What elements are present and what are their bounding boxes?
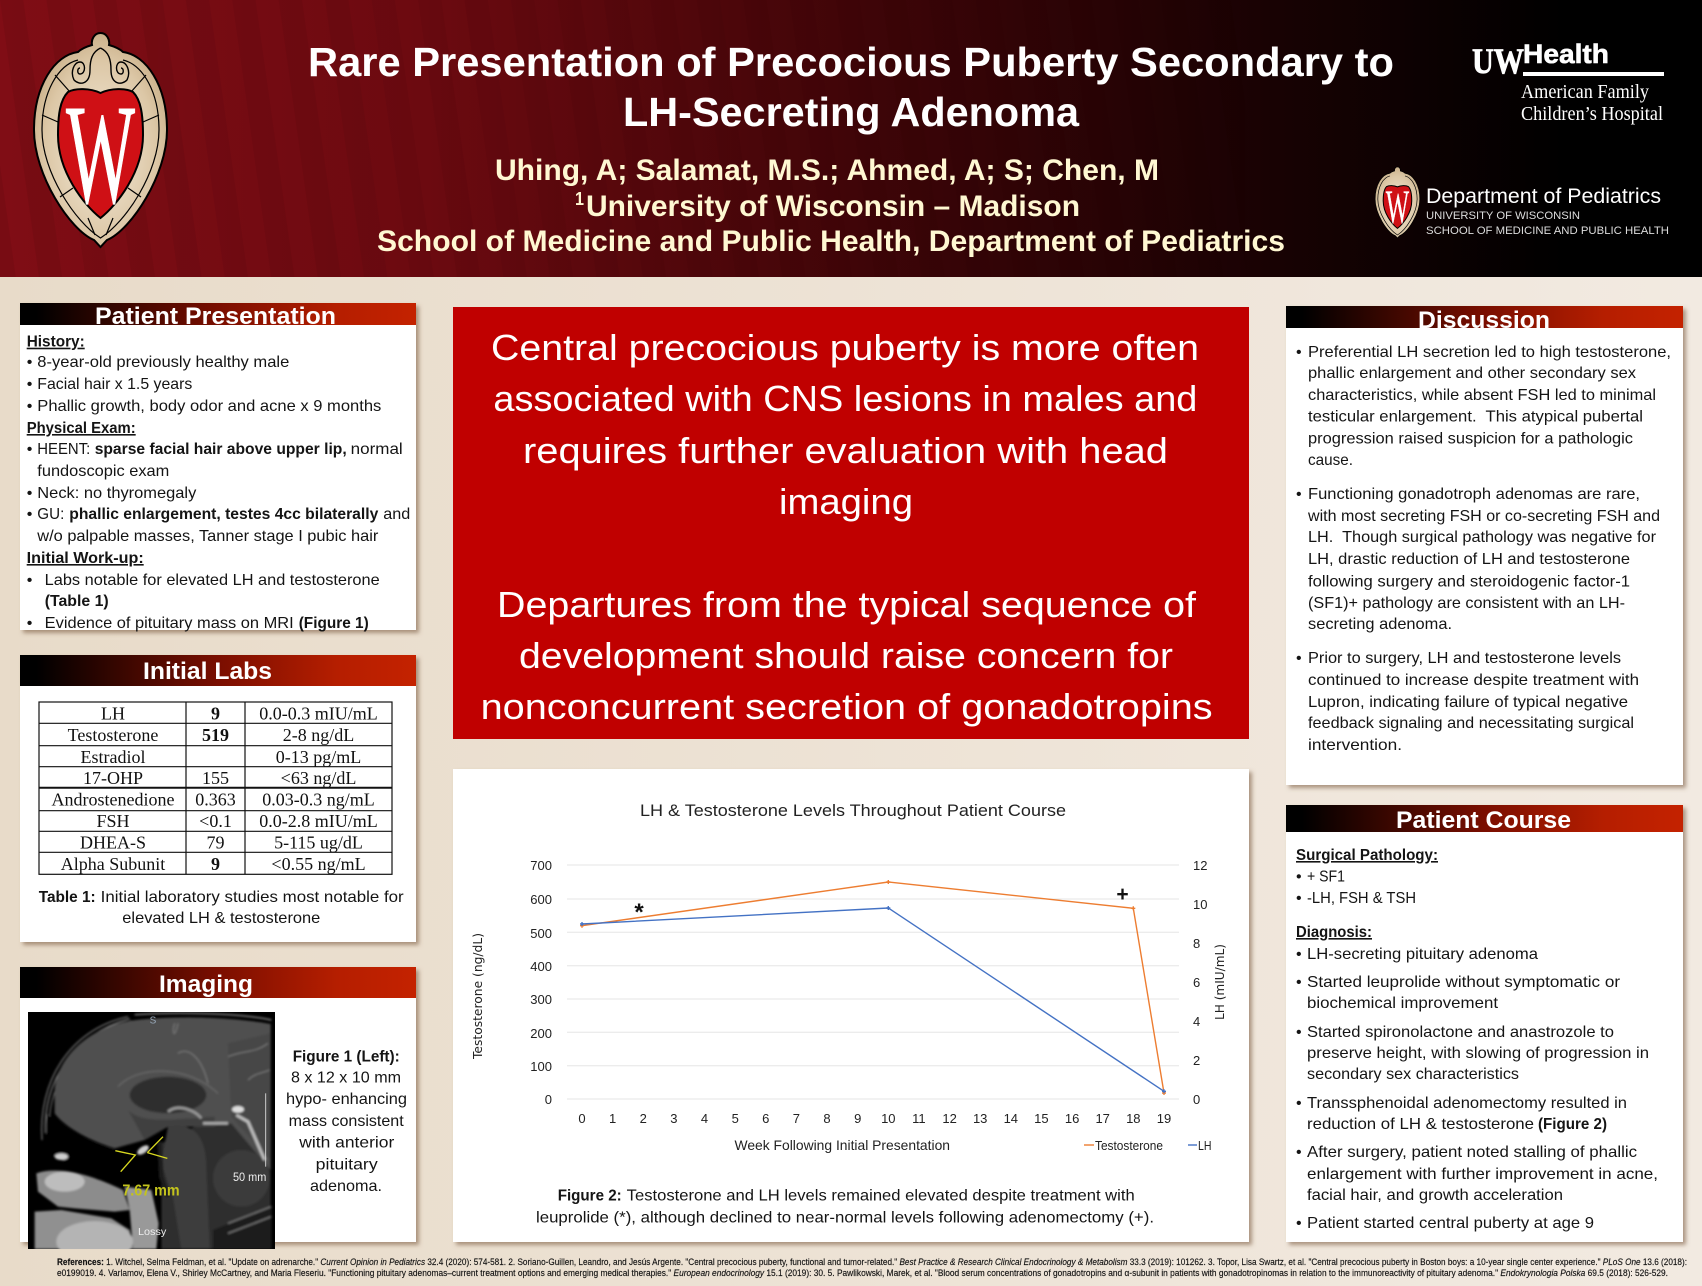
x axis ticks: 14 <box>1004 1111 1018 1126</box>
logo: UW Health American Family Children's Hospital: UW <box>1472 41 1524 81</box>
text: history, exam and work-up: phallic enlargement, testes 4cc bilaterally <box>69 506 378 523</box>
text: diagnosis and treatment: biochemical improvement <box>1307 995 1499 1012</box>
text: figure 1 caption: 8 x 12 x 10 mm <box>291 1069 401 1086</box>
text: discussion bullet 2: (SF1)+ pathology are consistent with an LH- <box>1308 595 1625 612</box>
text: diagnosis and treatment: (Figure 2) <box>1538 1116 1607 1133</box>
left axis ticks: 500 <box>530 926 552 941</box>
text: surgical pathology <box>1296 847 1438 907</box>
text: history, exam and work-up: • <box>27 506 32 523</box>
header banner <box>0 0 1702 277</box>
x axis ticks: 12 <box>942 1111 957 1126</box>
text: departures from typical sequence message: nonconcurrent secretion of gonadotropins <box>481 686 1213 727</box>
left axis ticks: 100 <box>530 1059 552 1074</box>
line chart <box>470 858 1227 1153</box>
text: history, exam and work-up: GU: <box>37 506 64 523</box>
logo: UW Health American Family Children's Hospital: American Family <box>1521 81 1649 103</box>
text: discussion bullet 3: Prior to surgery, LH and testosterone levels <box>1308 650 1621 667</box>
x axis ticks <box>578 1111 1171 1126</box>
text: surgical pathology: • <box>1296 890 1302 907</box>
right axis ticks <box>1193 858 1207 1107</box>
x axis ticks: 5 <box>732 1111 739 1126</box>
left axis ticks <box>530 858 552 1107</box>
text: history, exam and work-up: • <box>27 376 32 393</box>
text: history, exam and work-up: Facial hair x 1.5 years <box>37 376 192 393</box>
text: diagnosis and treatment: facial hair, and growth acceleration <box>1307 1187 1563 1204</box>
x axis ticks: 2 <box>640 1111 647 1126</box>
x axis ticks: 17 <box>1095 1111 1110 1126</box>
legend: Testosterone <box>1095 1138 1163 1153</box>
x axis ticks: 18 <box>1126 1111 1141 1126</box>
text: diagnosis and treatment: Patient started central puberty at age 9 <box>1307 1215 1594 1232</box>
panel: Patient Course <box>1286 805 1683 1242</box>
text: discussion bullet 3: feedback signaling and necessitating surgical <box>1308 715 1634 732</box>
text: discussion bullet 3: intervention. <box>1308 737 1402 754</box>
text: discussion bullet 1: Preferential LH secretion led to high testosterone, <box>1308 344 1671 361</box>
text: history, exam and work-up: • <box>27 398 32 415</box>
text: diagnosis and treatment: enlargement with further improvement in acne, <box>1307 1166 1658 1183</box>
text: departures from typical sequence message: Departures from the typical sequence of <box>497 584 1197 625</box>
x axis ticks: 16 <box>1065 1111 1079 1126</box>
panel: Discussion <box>1286 306 1683 785</box>
text: figure 1 caption: hypo- enhancing <box>286 1091 407 1108</box>
text: history, exam and work-up: Initial Work-up: <box>27 550 144 567</box>
title: Rare Presentation of Precocious Puberty Secondary to <box>308 39 1394 85</box>
text: diagnosis and treatment: preserve height, with slowing of progression in <box>1307 1045 1649 1062</box>
text: discussion bullet 2 <box>1296 486 1660 633</box>
text: discussion bullet 1: testicular enlargement. This atypical pubertal <box>1308 409 1643 426</box>
left axis ticks: 700 <box>530 858 552 873</box>
right axis ticks: 8 <box>1193 936 1200 951</box>
logo: Department of Pediatrics: Department of Pediatrics <box>1426 185 1661 208</box>
right axis ticks: 2 <box>1193 1053 1200 1068</box>
text: diagnosis and treatment: Diagnosis: <box>1296 924 1372 941</box>
table: initial lab values: 0.0-2.8 mIU/mL <box>259 811 378 831</box>
panel: key messages <box>453 307 1249 739</box>
text: discussion bullet 1: phallic enlargement and other secondary sex <box>1308 365 1636 382</box>
text: history, exam and work-up: • <box>27 441 32 458</box>
text: diagnosis and treatment: secondary sex characteristics <box>1307 1066 1519 1083</box>
annotation: leuprolide asterisk: * <box>634 899 644 926</box>
icon: UW crest small: W <box>1386 182 1409 234</box>
text: history, exam and work-up: HEENT: <box>37 441 90 458</box>
text: diagnosis and treatment: LH-secreting pituitary adenoma <box>1307 946 1538 963</box>
legend <box>1084 1138 1212 1153</box>
right axis ticks: 4 <box>1193 1014 1200 1029</box>
text: history, exam and work-up: Evidence of pituitary mass on MRI <box>45 615 294 632</box>
image: sagittal MRI of pituitary mass: 50 mm <box>233 1170 266 1184</box>
text: discussion bullet 1: cause. <box>1308 452 1353 469</box>
x axis ticks: 7 <box>793 1111 800 1126</box>
text: central precocious puberty message <box>491 327 1199 522</box>
text: history, exam and work-up: Phallic growth, body odor and acne x 9 months <box>37 398 381 415</box>
text: diagnosis and treatment: • <box>1296 1024 1302 1041</box>
text: discussion bullet 2: • <box>1296 486 1302 503</box>
table: initial lab values: LH <box>101 704 125 724</box>
text: figure 1 caption: adenoma. <box>310 1178 382 1195</box>
x axis ticks: 4 <box>701 1111 708 1126</box>
right axis ticks: 12 <box>1193 858 1207 873</box>
image: sagittal MRI of pituitary mass: 7.67 mm <box>122 1183 180 1200</box>
logo: Department of Pediatrics: SCHOOL OF MEDICINE AND PUBLIC HEALTH <box>1426 225 1669 237</box>
table: initial lab values: 79 <box>206 832 224 852</box>
text: discussion bullet 2: with most secreting FSH or co-secreting FSH and <box>1307 508 1660 525</box>
table: initial lab values <box>39 702 392 874</box>
text: history, exam and work-up: sparse facial hair above upper lip, <box>95 441 347 458</box>
title <box>308 39 1394 135</box>
table: initial lab values: Alpha Subunit <box>61 854 165 874</box>
text: figure 1 caption: mass consistent <box>289 1113 404 1130</box>
table: initial lab values: 0.363 <box>195 790 236 810</box>
right axis ticks: 6 <box>1193 975 1200 990</box>
text: diagnosis and treatment: • <box>1296 974 1302 991</box>
text: departures from typical sequence message <box>481 584 1213 727</box>
text: central precocious puberty message: requires further evaluation with head <box>523 430 1168 471</box>
heading: Initial Labs: Initial Labs <box>143 658 272 685</box>
logo: Department of Pediatrics: UNIVERSITY OF WISCONSIN <box>1426 210 1580 222</box>
text: table caption: elevated LH & testosterone <box>122 910 320 927</box>
text: history, exam and work-up: fundoscopic exam <box>37 463 169 480</box>
table: initial lab values: FSH <box>96 811 130 831</box>
text: discussion bullet 3: continued to increase despite treatment with <box>1308 672 1639 689</box>
text: figure 1 caption <box>286 1049 407 1195</box>
text: surgical pathology: Surgical Pathology: <box>1296 847 1438 864</box>
table: initial lab values: DHEA-S <box>80 832 146 852</box>
x axis ticks: 15 <box>1034 1111 1049 1126</box>
icon: UW crest large: W <box>66 75 135 233</box>
text: figure 2 caption: Testosterone and LH levels remained elevated despite treatment with <box>627 1188 1135 1205</box>
panel: Imaging <box>20 967 416 1262</box>
text: discussion bullet 2: secreting adenoma. <box>1308 616 1452 633</box>
text: table caption: Initial laboratory studies most notable for <box>101 889 404 906</box>
x axis ticks: 10 <box>881 1111 896 1126</box>
text: discussion bullet 2: LH. Though surgical pathology was negative for <box>1308 529 1657 546</box>
table: initial lab values: 9 <box>211 854 220 874</box>
text: history, exam and work-up: Labs notable for elevated LH and testosterone <box>45 572 380 589</box>
left axis ticks: 200 <box>530 1026 552 1041</box>
x axis ticks: 13 <box>973 1111 987 1126</box>
text: diagnosis and treatment: Started leuprolide without symptomatic or <box>1307 974 1621 991</box>
text: diagnosis and treatment: Transsphenoidal adenomectomy resulted in <box>1307 1095 1627 1112</box>
text: history, exam and work-up: 8-year-old previously healthy male <box>37 354 289 371</box>
references <box>57 1257 1687 1279</box>
x axis ticks: 0 <box>578 1111 586 1126</box>
panel: Patient Presentation <box>20 303 416 632</box>
text: history, exam and work-up: Neck: no thyromegaly <box>37 485 196 502</box>
text: figure 2 caption <box>536 1188 1154 1227</box>
table: initial lab values: 0.0-0.3 mIU/mL <box>259 704 378 724</box>
text: discussion bullet 1: progression raised suspicion for a pathologic <box>1308 430 1633 447</box>
table: initial lab values: 9 <box>211 704 220 724</box>
text: diagnosis and treatment: • <box>1296 946 1302 963</box>
text: history, exam and work-up: (Table 1) <box>45 593 109 610</box>
text: history, exam and work-up: • <box>27 485 32 502</box>
text: figure 1 caption: pituitary <box>316 1156 378 1173</box>
text: table caption <box>39 889 404 927</box>
table: initial lab values: Estradiol <box>80 747 146 767</box>
text: history, exam and work-up: • <box>27 354 32 371</box>
authors and affiliations: University of Wisconsin – Madison <box>586 190 1080 223</box>
text: history, exam and work-up <box>27 334 410 632</box>
authors and affiliations: Uhing, A; Salamat, M.S.; Ahmed, A; S; Chen, M <box>495 154 1159 187</box>
text: departures from typical sequence message: development should raise concern for <box>519 635 1173 676</box>
text: diagnosis and treatment: • <box>1296 1215 1302 1232</box>
text: history, exam and work-up: normal <box>351 441 403 458</box>
text: diagnosis and treatment: After surgery, patient noted stalling of phallic <box>1307 1144 1637 1161</box>
heading: Imaging: Imaging <box>159 971 253 998</box>
text: discussion bullet 1: characteristics, while absent FSH led to minimal <box>1308 387 1656 404</box>
LH series <box>580 906 1166 1093</box>
references: e0199019. 4. Varlamov, Elena V., Shirley McCartney, and Maria Fleseriu. "Functioning pituitary adenomas–current treatment options and emerging medical therapies." European endocrinology 15.1 (2019): 30. 5. Pawlikowski, Marek, et al. "Blood serum concentrations of gonadotropins and α-subunit in patients with gonadotropinomas in relation to the immunoreactivity of pituitary adenoma." Endokrynologia Polska 69.5 (2018): 526-529. <box>57 1268 1668 1279</box>
x axis ticks: 6 <box>762 1111 769 1126</box>
text: table caption: Table 1: <box>39 889 96 906</box>
x axis ticks: 11 <box>912 1111 926 1126</box>
text: discussion bullet 1 <box>1296 344 1671 469</box>
table: initial lab values: 2-8 ng/dL <box>283 725 354 745</box>
x axis ticks: 19 <box>1157 1111 1171 1126</box>
table: initial lab values: 17-OHP <box>83 768 143 788</box>
image: sagittal MRI of pituitary mass: S <box>150 1015 157 1026</box>
text: diagnosis and treatment <box>1296 924 1658 1232</box>
text: discussion bullet 1: • <box>1296 344 1302 361</box>
table: initial lab values: 0-13 pg/mL <box>276 747 361 767</box>
left axis ticks: 400 <box>530 959 552 974</box>
left axis ticks: 600 <box>530 892 552 907</box>
authors and affiliations <box>377 154 1285 258</box>
logo: UW Health American Family Children's Hospital <box>1472 39 1664 125</box>
table: initial lab values: 155 <box>202 768 229 788</box>
panel: LH and testosterone chart <box>453 769 1249 1242</box>
table: initial lab values: Testosterone <box>68 725 158 745</box>
text: surgical pathology: + SF1 <box>1307 869 1345 886</box>
text: central precocious puberty message: imaging <box>779 481 913 522</box>
right axis ticks: 0 <box>1193 1092 1200 1107</box>
logo: Department of Pediatrics <box>1375 167 1669 238</box>
table: initial lab values: 0.03-0.3 ng/mL <box>262 790 375 810</box>
text: history, exam and work-up: • <box>27 615 32 632</box>
authors and affiliations: 1 <box>575 189 584 209</box>
text: figure 1 caption: Figure 1 (Left): <box>293 1049 400 1066</box>
x axis ticks: 3 <box>670 1111 678 1126</box>
y axis label: testosterone: Testosterone (ng/dL) <box>470 933 485 1060</box>
x axis ticks: 9 <box>854 1111 861 1126</box>
text: figure 1 caption: with anterior <box>298 1135 395 1152</box>
text: history, exam and work-up: Physical Exam: <box>27 420 136 437</box>
heading: Patient Course: Patient Course <box>1396 807 1571 834</box>
table: initial lab values: 5-115 ug/dL <box>274 832 363 852</box>
text: discussion bullet 3: Lupron, indicating failure of typical negative <box>1308 694 1628 711</box>
right axis ticks: 10 <box>1193 897 1207 912</box>
image: sagittal MRI of pituitary mass: Lossy <box>138 1227 166 1238</box>
text: surgical pathology: • <box>1296 869 1302 886</box>
references: References: 1. Witchel, Selma Feldman, et al. "Update on adrenarche." Current Opinion in Pediatrics 32.4 (2020): 574-581. 2. Soriano-Guillen, Leandro, and Jesús Argente. "Central precocious puberty, functional and tumor-related." Best Practice & Research Clinical Endocrinology & Metabolism 33.3 (2019): 101262. 3. Topor, Lisa Swartz, et al. "Central precocious puberty in Boston boys: a 10-year single center experience." PLoS One 13.6 (2018): <box>57 1257 1687 1268</box>
text: diagnosis and treatment: • <box>1296 1144 1302 1161</box>
x axis ticks: 8 <box>823 1111 831 1126</box>
text: discussion bullet 2: following surgery and steroidogenic factor-1 <box>1308 573 1630 590</box>
text: diagnosis and treatment: • <box>1296 1095 1302 1112</box>
text: discussion bullet 3: • <box>1296 650 1302 667</box>
text: history, exam and work-up: (Figure 1) <box>299 615 369 632</box>
table: initial lab values: 519 <box>202 725 229 745</box>
y axis label: LH: LH (mIU/mL) <box>1212 944 1227 1020</box>
text: history, exam and work-up: and <box>383 506 410 523</box>
heading: Discussion: Discussion <box>1418 307 1550 334</box>
testosterone series <box>580 880 1166 1095</box>
text: discussion bullet 3 <box>1296 650 1639 754</box>
image: sagittal MRI of pituitary mass <box>28 1012 275 1262</box>
text: discussion bullet 2: Functioning gonadotroph adenomas are rare, <box>1308 486 1640 503</box>
text: history, exam and work-up: • <box>27 572 32 589</box>
table: initial lab values: <0.1 <box>199 811 232 831</box>
text: history, exam and work-up: w/o palpable masses, Tanner stage I pubic hair <box>36 528 379 545</box>
text: surgical pathology: -LH, FSH & TSH <box>1307 890 1416 907</box>
text: central precocious puberty message: Central precocious puberty is more often <box>491 327 1199 368</box>
text: central precocious puberty message: associated with CNS lesions in males and <box>493 378 1197 419</box>
text: diagnosis and treatment: Started spironolactone and anastrozole to <box>1307 1024 1614 1041</box>
text: discussion bullet 2: LH, drastic reduction of LH and testosterone <box>1308 551 1630 568</box>
annotation: adenomectomy plus: + <box>1116 883 1129 906</box>
left axis ticks: 300 <box>530 992 552 1007</box>
icon: UW crest small <box>1375 167 1420 238</box>
text: figure 2 caption: leuprolide (*), although declined to near-normal levels following adenomectomy (+). <box>536 1210 1154 1227</box>
authors and affiliations: School of Medicine and Public Health, Department of Pediatrics <box>377 225 1285 258</box>
legend: LH <box>1198 1138 1212 1153</box>
table: initial lab values: <0.55 ng/mL <box>271 854 366 874</box>
chart title: LH & Testosterone Levels Throughout Patient Course <box>640 801 1066 820</box>
heading: Patient Presentation: Patient Presentation <box>95 303 336 330</box>
panel: Initial Labs <box>20 655 416 942</box>
text: diagnosis and treatment: reduction of LH & testosterone <box>1307 1116 1534 1133</box>
icon: UW crest large <box>34 33 167 247</box>
x axis ticks: 1 <box>609 1111 616 1126</box>
logo: UW Health American Family Children's Hospital: Children’s Hospital <box>1521 103 1663 125</box>
table: initial lab values: Androstenedione <box>52 790 174 810</box>
left axis ticks: 0 <box>545 1092 552 1107</box>
table: initial lab values: <63 ng/dL <box>281 768 356 788</box>
text: figure 2 caption: Figure 2: <box>558 1188 622 1205</box>
logo: UW Health American Family Children's Hospital: Health <box>1523 39 1609 69</box>
title: LH-Secreting Adenoma <box>623 89 1079 135</box>
text: history, exam and work-up: History: <box>27 334 85 351</box>
x axis label: Week Following Initial Presentation <box>734 1137 950 1153</box>
